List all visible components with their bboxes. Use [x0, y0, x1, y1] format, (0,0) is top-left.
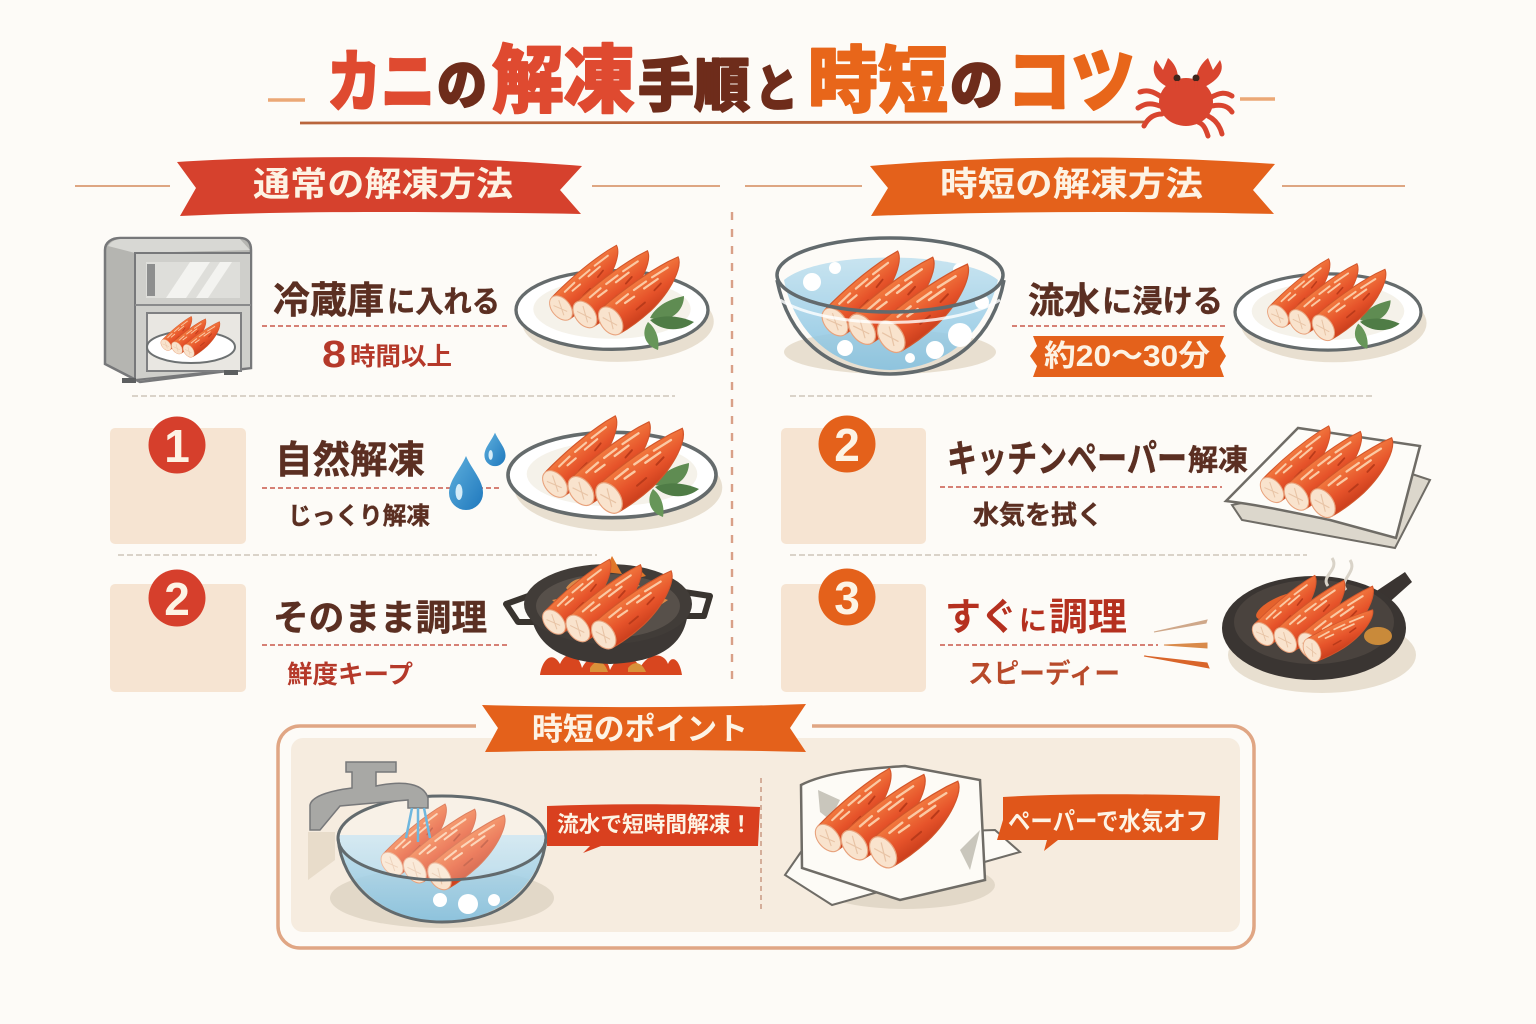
text: speedy: スピーディー: [968, 658, 1120, 689]
icon: speed lines: [1144, 620, 1209, 668]
text: keep fresh: 鮮度キープ: [287, 661, 413, 689]
icon: crab legs on paper towels: [785, 765, 1020, 909]
image placeholder: [781, 428, 926, 544]
heading: normal thaw banner: 通常の解凍方法: [253, 166, 513, 204]
text: slow thaw: じっくり解凍: [288, 503, 430, 530]
heading: kitchen paper thaw: キッチンペーパー: [947, 439, 1187, 481]
title: カニ: [327, 27, 435, 126]
callout: remove moisture with paper: [997, 794, 1220, 851]
number badge 1: 1: [164, 420, 190, 472]
icon: frying pan: [1222, 558, 1416, 693]
panel: normal step 2 cook: [110, 556, 710, 692]
number badge 3: 3: [834, 572, 860, 624]
number badge 1: [148, 416, 206, 474]
icon: crab legs on plate: [516, 243, 714, 362]
text: 8 hours or more: 時間以上: [350, 343, 452, 371]
panel: quick thaw points: [278, 704, 1254, 948]
title: の: [437, 41, 487, 120]
heading: cook immediately: に: [1019, 605, 1047, 636]
callout: shorten time with running water: [547, 804, 760, 853]
heading: cook immediately: [945, 597, 1127, 639]
inner panel: [291, 738, 1240, 932]
icon: water drops: [449, 433, 506, 510]
image placeholder: [110, 428, 246, 544]
text: wipe moisture: 水気を拭く: [973, 500, 1103, 530]
heading: soak in running water: に浸ける: [1102, 284, 1223, 319]
heading: quick thaw banner: [870, 157, 1275, 216]
title: 時短: [808, 22, 948, 127]
title: [327, 21, 1135, 128]
title: の: [950, 41, 1003, 120]
heading: cook as is: そのまま調理: [273, 597, 487, 638]
heading: cook immediately: すぐ: [945, 597, 1017, 639]
heading: normal thaw banner: [177, 157, 582, 216]
title: と: [755, 49, 798, 121]
number badge 2: [818, 416, 876, 472]
time badge: 約20〜30分: [1044, 340, 1210, 373]
heading: put in fridge: [273, 280, 500, 321]
panel: quick step 3 cook immediately: [781, 558, 1416, 693]
title: 手順: [638, 39, 750, 123]
image placeholder: [110, 584, 246, 692]
panel: normal step 1 natural thaw: [110, 413, 722, 544]
heading: quick thaw points banner: 時短のポイント: [532, 712, 748, 747]
text: 8 hours or more: [322, 334, 452, 376]
text: 8 hours or more: 8: [322, 334, 346, 376]
heading: natural thaw: 自然解凍: [275, 440, 425, 482]
heading: quick thaw points banner: [482, 704, 806, 752]
number badge 2: 2: [164, 573, 190, 625]
heading: put in fridge: に入れる: [387, 286, 500, 319]
title underline: [300, 122, 1145, 123]
icon: crab legs on plate: [1235, 256, 1427, 362]
heading: quick thaw banner: 時短の解凍方法: [940, 166, 1203, 204]
callout: shorten time with running water: 流水で短時間解凍！: [557, 812, 752, 837]
heading: cook immediately: 調理: [1049, 597, 1127, 639]
panel: quick step 1 running water: [777, 238, 1427, 377]
icon: crab: [1138, 58, 1232, 136]
heading: kitchen paper thaw: 解凍: [1188, 444, 1248, 477]
image placeholder: [781, 584, 926, 692]
icon: pot over flame: [506, 556, 710, 675]
icon: refrigerator: [105, 238, 251, 383]
callout: remove moisture with paper: ペーパーで水気オフ: [1008, 808, 1208, 836]
panel: normal step 0 refrigerator: [105, 238, 714, 383]
number badge 2: 2: [834, 419, 860, 471]
panel: quick step 2 kitchen paper: [781, 416, 1430, 548]
number badge 2: [148, 570, 206, 626]
icon: faucet and bowl: [308, 762, 554, 928]
icon: glass bowl of water: [777, 238, 1004, 374]
title: 解凍: [492, 21, 635, 128]
icon: crab legs on plate: [508, 413, 722, 531]
time badge: [1030, 336, 1226, 377]
heading: put in fridge: 冷蔵庫: [273, 280, 384, 321]
heading: soak in running water: 流水: [1028, 280, 1100, 321]
icon: crab legs on paper: [1226, 423, 1430, 548]
title: コツ: [1007, 26, 1135, 127]
number badge 3: [818, 568, 876, 626]
heading: soak in running water: [1028, 280, 1223, 321]
